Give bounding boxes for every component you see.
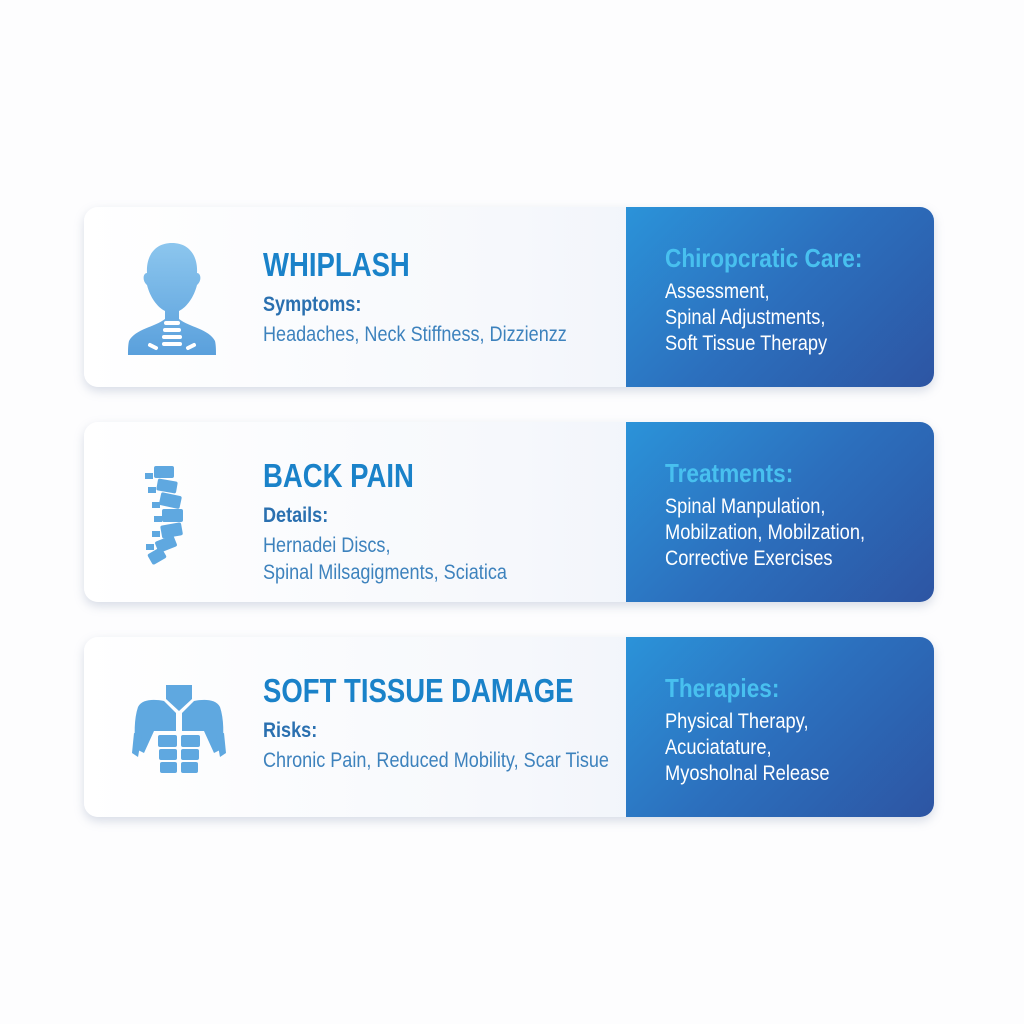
text: back pain: Details: (263, 504, 328, 527)
icon: torso (132, 685, 226, 773)
panel: chiropractic care: Soft Tissue Therapy (665, 332, 827, 355)
panel: therapies: Myosholnal Release (665, 762, 830, 785)
text: soft tissue damage: Chronic Pain, Reduced Mobility, Scar Tisue (263, 749, 609, 772)
panel: treatments: Spinal Manpulation, (665, 495, 825, 518)
panel: treatments: Corrective Exercises (665, 547, 833, 570)
text: soft tissue damage (263, 672, 609, 772)
text: soft tissue damage: Risks: (263, 719, 317, 742)
icon: spine (145, 466, 183, 564)
card: back pain (84, 422, 934, 602)
text: whiplash: Headaches, Neck Stiffness, Dizzienzz (263, 323, 567, 346)
panel: therapies: Acuciatature, (665, 736, 772, 759)
card: soft tissue damage (84, 637, 934, 817)
panel: therapies (626, 637, 934, 817)
text: soft tissue damage: SOFT TISSUE DAMAGE (263, 672, 573, 709)
text: whiplash (263, 246, 567, 346)
panel: therapies: Physical Therapy, (665, 710, 809, 733)
panel: treatments: Treatments: (665, 458, 793, 488)
panel: treatments: Mobilzation, Mobilzation, (665, 521, 865, 544)
text: back pain (263, 457, 507, 584)
panel: chiropractic care: Chiropcratic Care: (665, 243, 862, 273)
icon: head and neck (128, 243, 216, 355)
panel: chiropractic care: Assessment, (665, 280, 770, 303)
text: whiplash: WHIPLASH (263, 246, 410, 283)
card: whiplash (84, 207, 934, 387)
text: back pain: Spinal Milsagigments, Sciatica (263, 561, 507, 584)
text: whiplash: Symptoms: (263, 293, 361, 316)
panel: chiropractic care (626, 207, 934, 387)
panel: therapies: Therapies: (665, 673, 779, 703)
text: back pain: Hernadei Discs, (263, 534, 390, 557)
panel: chiropractic care: Spinal Adjustments, (665, 306, 825, 329)
panel: treatments (626, 422, 934, 602)
text: back pain: BACK PAIN (263, 457, 414, 494)
